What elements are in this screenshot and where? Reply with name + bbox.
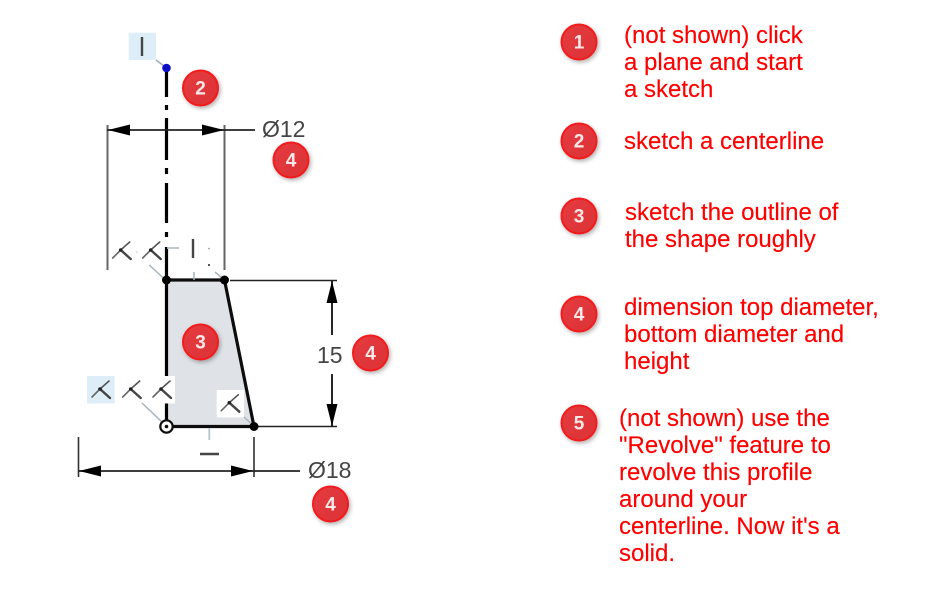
step 5: centerline. Now it's a [619,513,840,540]
horizontal constraint below the profile [200,428,219,454]
profile vertices [162,276,258,431]
height dimension [230,280,343,426]
step 4: bottom diameter and [624,321,844,348]
height dimension: 15 [317,342,343,368]
step 3: 3 [574,206,584,228]
step 4: 4 [574,304,585,326]
shape profile fill [166,280,254,426]
sketch diagram [78,33,351,483]
step 5 [562,405,840,567]
step 5: solid. [619,540,675,567]
step 3: sketch the outline of [625,199,839,226]
step 1: a plane and start [624,49,803,76]
badge 2 on centerline [183,70,218,106]
constraint tags at bottom left [87,376,175,422]
step 1: 1 [574,32,585,54]
badge 3 in shape: 3 [195,332,206,354]
outline of the shape [166,280,254,426]
constraint tag at bottom right [217,390,253,425]
step 4: dimension top diameter, [624,294,879,321]
badge 4 at bottom diameter [313,486,348,522]
centerline [165,72,168,426]
badge 4 at top diameter: 4 [286,150,297,172]
step 4: height [624,348,690,375]
step 3: the shape roughly [625,226,816,253]
step 3 [562,198,839,253]
badge 2 on centerline: 2 [195,78,206,100]
badge 3 in shape [183,324,218,360]
constraint tags above the profile [113,239,222,280]
step 2: 2 [574,132,584,152]
top diameter extension lines [108,125,224,270]
step 5: revolve this profile [619,459,812,486]
badge 4 at height [353,336,388,370]
step 4 [562,294,879,375]
step 2: sketch a centerline [624,128,824,155]
badge 4 at bottom diameter: 4 [325,494,336,516]
bottom diameter dimension [78,437,351,483]
step 2 [562,124,824,158]
top diameter dimension [107,116,305,142]
step 1: a sketch [624,76,713,103]
origin point [160,420,173,433]
badge 4 at height: 4 [365,344,376,364]
bottom diameter dimension: Ø18 [308,457,351,483]
step 5: 5 [574,414,585,434]
step 5: (not shown) use the [619,405,830,432]
constraint: vertical tag at top [129,33,164,66]
top diameter dimension: Ø12 [262,116,305,142]
step 1 [562,22,804,103]
step 1: (not shown) click [624,22,804,49]
badge 4 at top diameter [274,142,308,178]
step 5: around your [619,486,747,513]
step 5: "Revolve" feature to [619,432,831,459]
centerline top point [162,64,171,72]
